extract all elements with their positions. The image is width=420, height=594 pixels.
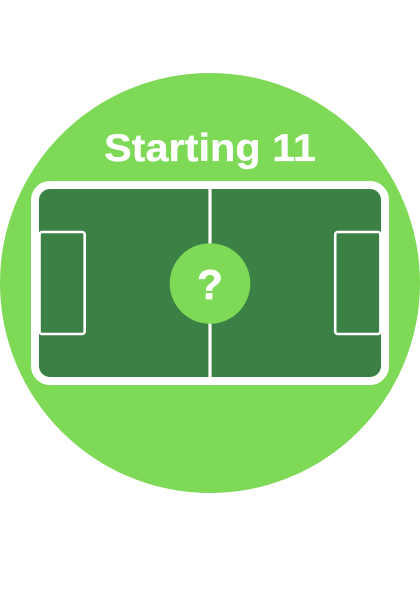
halfway line bbox=[208, 188, 212, 378]
question mark: ? bbox=[197, 261, 223, 308]
right penalty box bbox=[335, 232, 380, 334]
title: Starting 11 bbox=[104, 127, 316, 170]
football pitch bbox=[35, 185, 385, 381]
centre circle bbox=[170, 243, 250, 324]
background circle bbox=[0, 73, 420, 493]
pitch surface and outer border bbox=[35, 185, 385, 381]
left penalty box bbox=[40, 232, 85, 334]
